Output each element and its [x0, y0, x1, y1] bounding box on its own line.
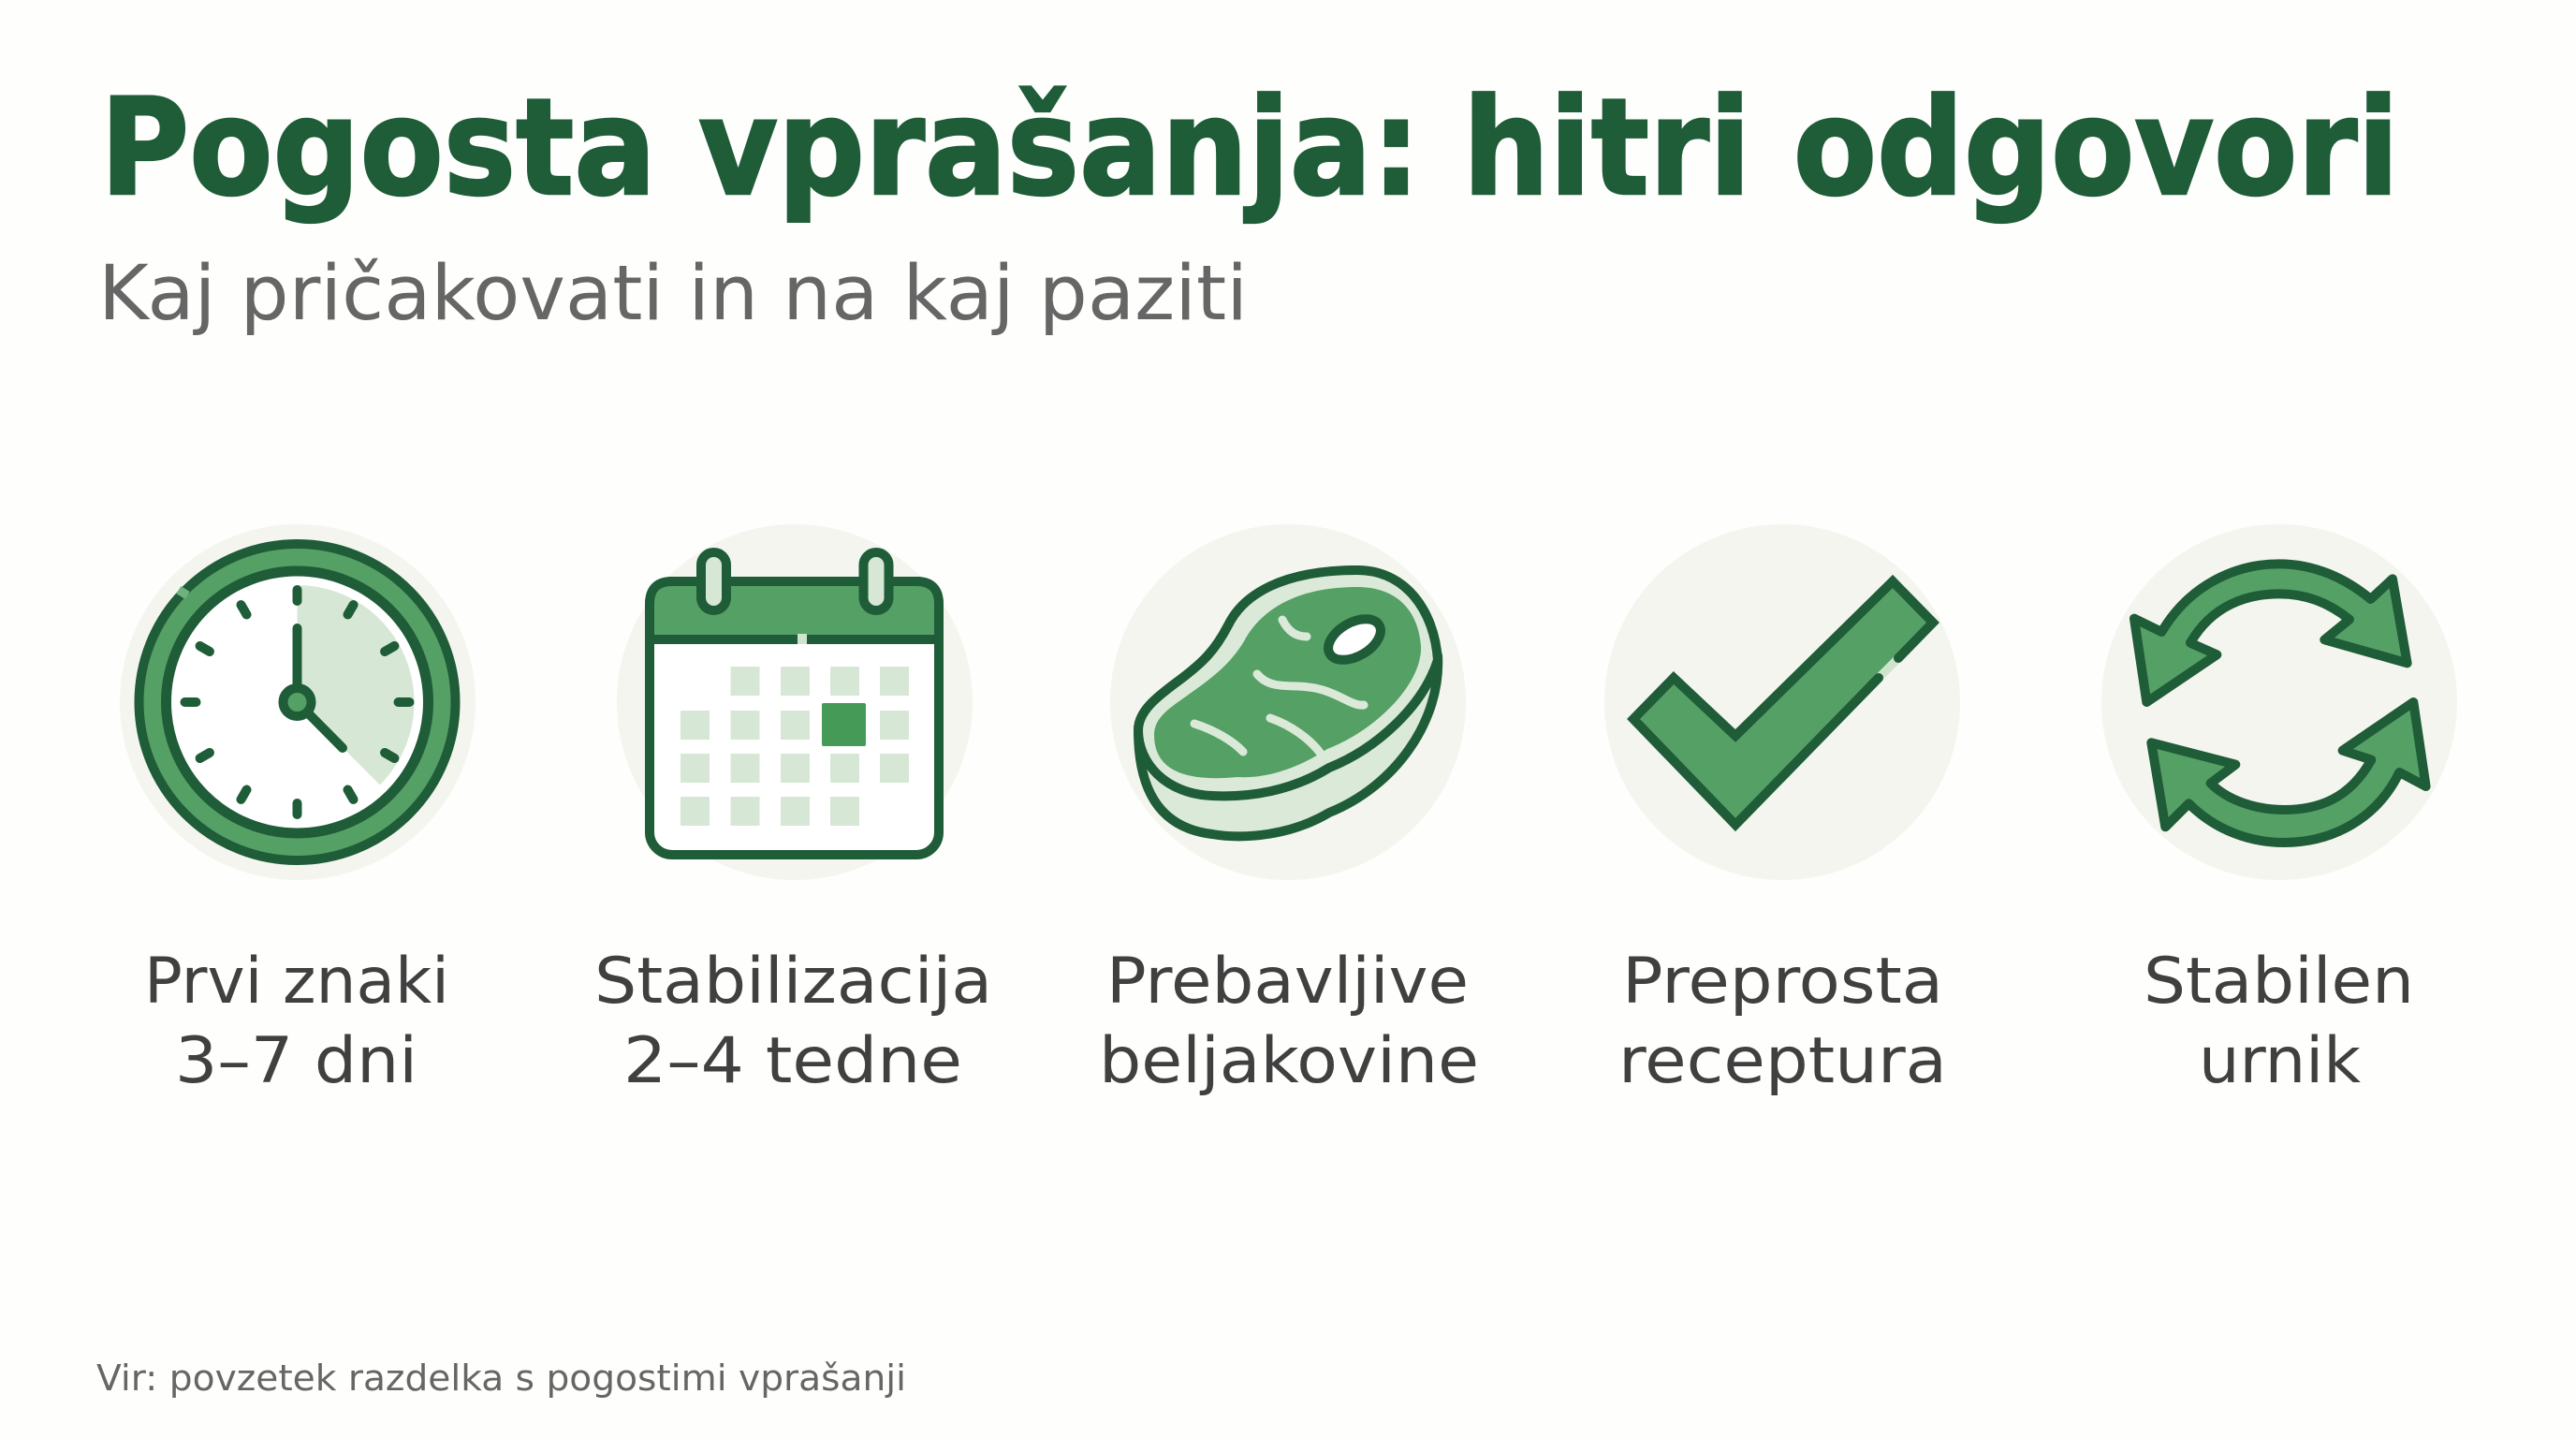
label: Stabilizacija 2–4 tedne [594, 945, 992, 1098]
source footnote: Vir: povzetek razdelka s pogostimi vprašanji [96, 1357, 906, 1399]
label: Prvi znaki 3–7 dni: Prvi znaki [144, 945, 449, 1019]
label: Prvi znaki 3–7 dni [144, 945, 449, 1098]
label: Stabilizacija 2–4 tedne: Stabilizacija [594, 945, 992, 1019]
label: Stabilen urnik [2144, 945, 2414, 1098]
icon: check mark [1604, 524, 1960, 880]
label: Prebavljive beljakovine: Prebavljive [1106, 945, 1469, 1019]
label: Preprosta receptura: Preprosta [1622, 945, 1943, 1019]
label: Prebavljive beljakovine [1099, 945, 1479, 1098]
label: Prebavljive beljakovine: beljakovine [1099, 1024, 1479, 1098]
label: Stabilen urnik: urnik [2199, 1024, 2362, 1098]
icon: clock [120, 524, 476, 880]
label: Stabilen urnik: Stabilen [2144, 945, 2414, 1019]
icon: cycle arrows [2101, 524, 2457, 880]
icon: steak [1110, 524, 1466, 880]
label: Preprosta receptura [1618, 945, 1947, 1098]
label: Prvi znaki 3–7 dni: 3–7 dni [175, 1024, 417, 1098]
subtitle: Kaj pričakovati in na kaj paziti [98, 250, 1248, 338]
label: Preprosta receptura: receptura [1618, 1024, 1947, 1098]
icon: calendar [617, 524, 973, 880]
label: Stabilizacija 2–4 tedne: 2–4 tedne [623, 1024, 962, 1098]
title: Pogosta vprašanja: hitri odgovori [100, 69, 2399, 226]
